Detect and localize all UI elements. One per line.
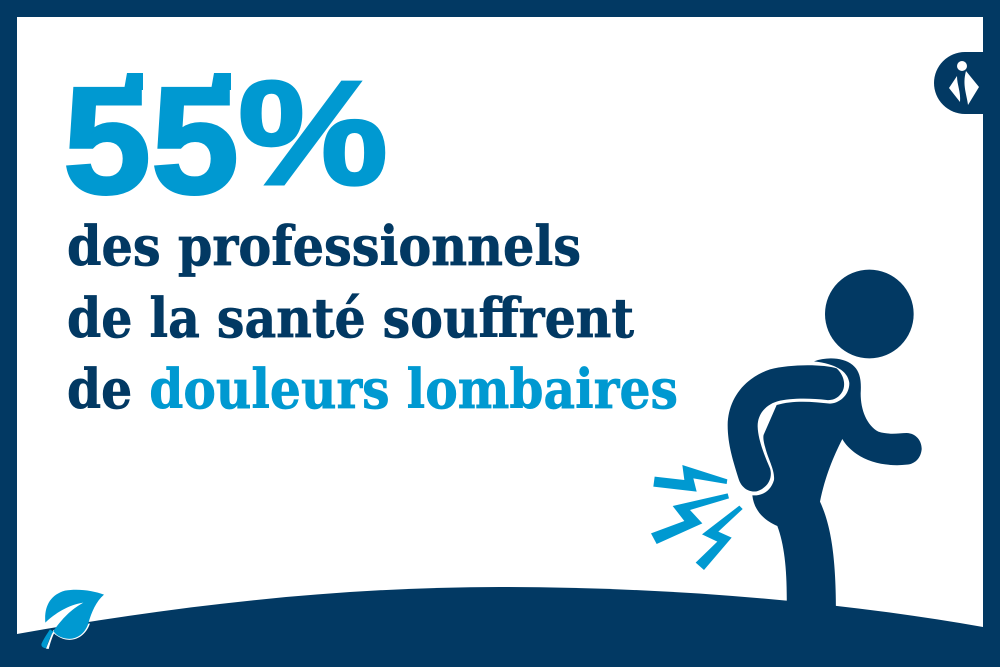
leaf stem [41,629,53,648]
bolt bottom [696,506,743,570]
headline line 1: des professionnels [67,214,581,278]
bolt top [653,465,727,492]
torso, leg and front arm [752,358,922,610]
tab background [934,52,983,114]
icon: pain lightning bolts [651,465,743,570]
logo left diamond [949,76,960,102]
digit flag accents [124,73,231,90]
headline text [67,214,678,421]
headline line 3: de douleurs lombaires [67,357,678,421]
leaf body [45,590,104,639]
icon: person with back pain [728,270,922,610]
bolt middle [651,493,729,544]
headline line 2: de la santé souffrent [67,286,634,350]
statistic percent sign: % [238,51,388,216]
back arm [728,365,844,492]
statistic digit 5: 5 [151,56,239,226]
logo figure [949,61,979,105]
ground hill [17,587,983,667]
logo dot [957,61,967,71]
logo right diamond [964,71,979,105]
head [825,270,914,358]
statistic digit 5: 5 [63,56,151,226]
big statistic: 55% [63,51,388,226]
icon: leaf logo [41,590,104,649]
leaf white outline [46,623,90,649]
logo tab top right [934,52,983,114]
